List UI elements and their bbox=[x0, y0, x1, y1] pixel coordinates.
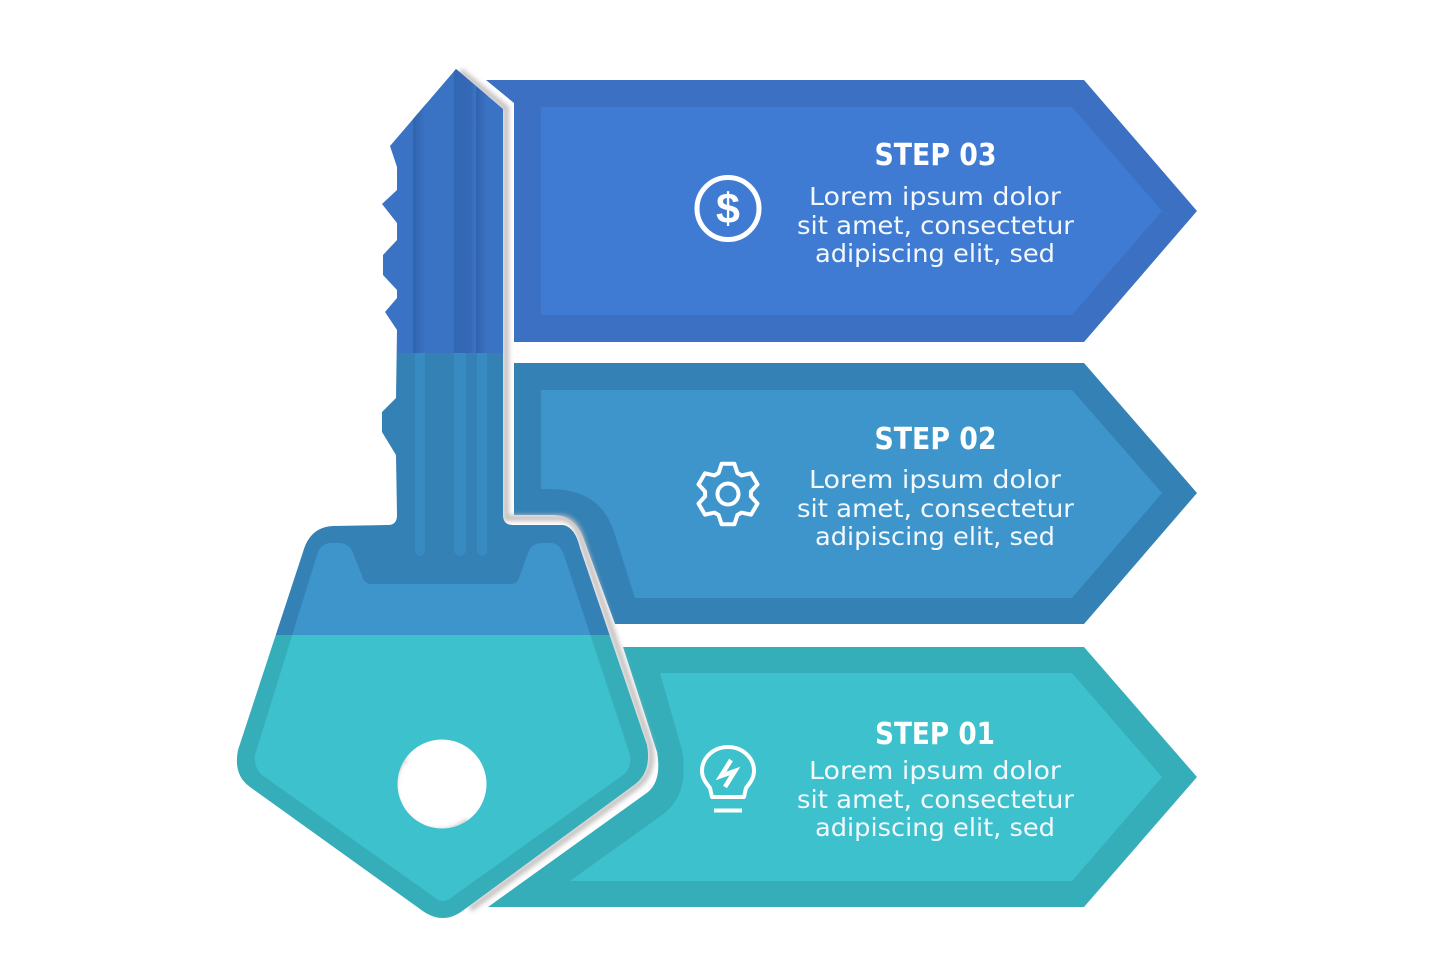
key head inner: blue band bbox=[292, 543, 590, 635]
icon: dollar coin bbox=[697, 178, 759, 240]
text block: step 01: sit amet, consectetur bbox=[797, 785, 1075, 814]
key head inner: teal area bbox=[255, 635, 630, 901]
key bbox=[237, 60, 651, 918]
heading: step 03: STEP 03 bbox=[874, 138, 996, 173]
text block: step 03: adipiscing elit, sed bbox=[815, 239, 1055, 268]
key blade grooves bbox=[413, 60, 488, 353]
text block: step 03 bbox=[797, 182, 1075, 268]
panel: step 03 bbox=[486, 80, 1197, 342]
key hole bbox=[394, 740, 486, 832]
icon: gear bbox=[698, 464, 758, 524]
text block: step 01 bbox=[797, 756, 1075, 842]
text block: step 01: Lorem ipsum dolor bbox=[809, 756, 1062, 785]
text block: step 02: sit amet, consectetur bbox=[797, 494, 1075, 523]
text block: step 02: adipiscing elit, sed bbox=[815, 522, 1055, 551]
icon: dollar coin: $ bbox=[716, 185, 740, 233]
key body: mid section bbox=[276, 353, 610, 635]
text block: step 02 bbox=[797, 465, 1075, 551]
panel: step 02 bbox=[514, 363, 1197, 624]
key shadow bbox=[460, 71, 651, 909]
heading: step 01: STEP 01 bbox=[875, 717, 995, 752]
icon: light bulb bbox=[702, 747, 754, 810]
key lower grooves bbox=[415, 353, 487, 556]
key body: blue blade bbox=[382, 69, 503, 353]
text block: step 01: adipiscing elit, sed bbox=[815, 813, 1055, 842]
text block: step 02: Lorem ipsum dolor bbox=[809, 465, 1062, 494]
panel: step 01 bbox=[488, 647, 1197, 907]
key body: teal head bbox=[236, 635, 648, 918]
text block: step 03: sit amet, consectetur bbox=[797, 211, 1075, 240]
text block: step 03: Lorem ipsum dolor bbox=[809, 182, 1062, 211]
heading: step 02: STEP 02 bbox=[874, 422, 996, 457]
